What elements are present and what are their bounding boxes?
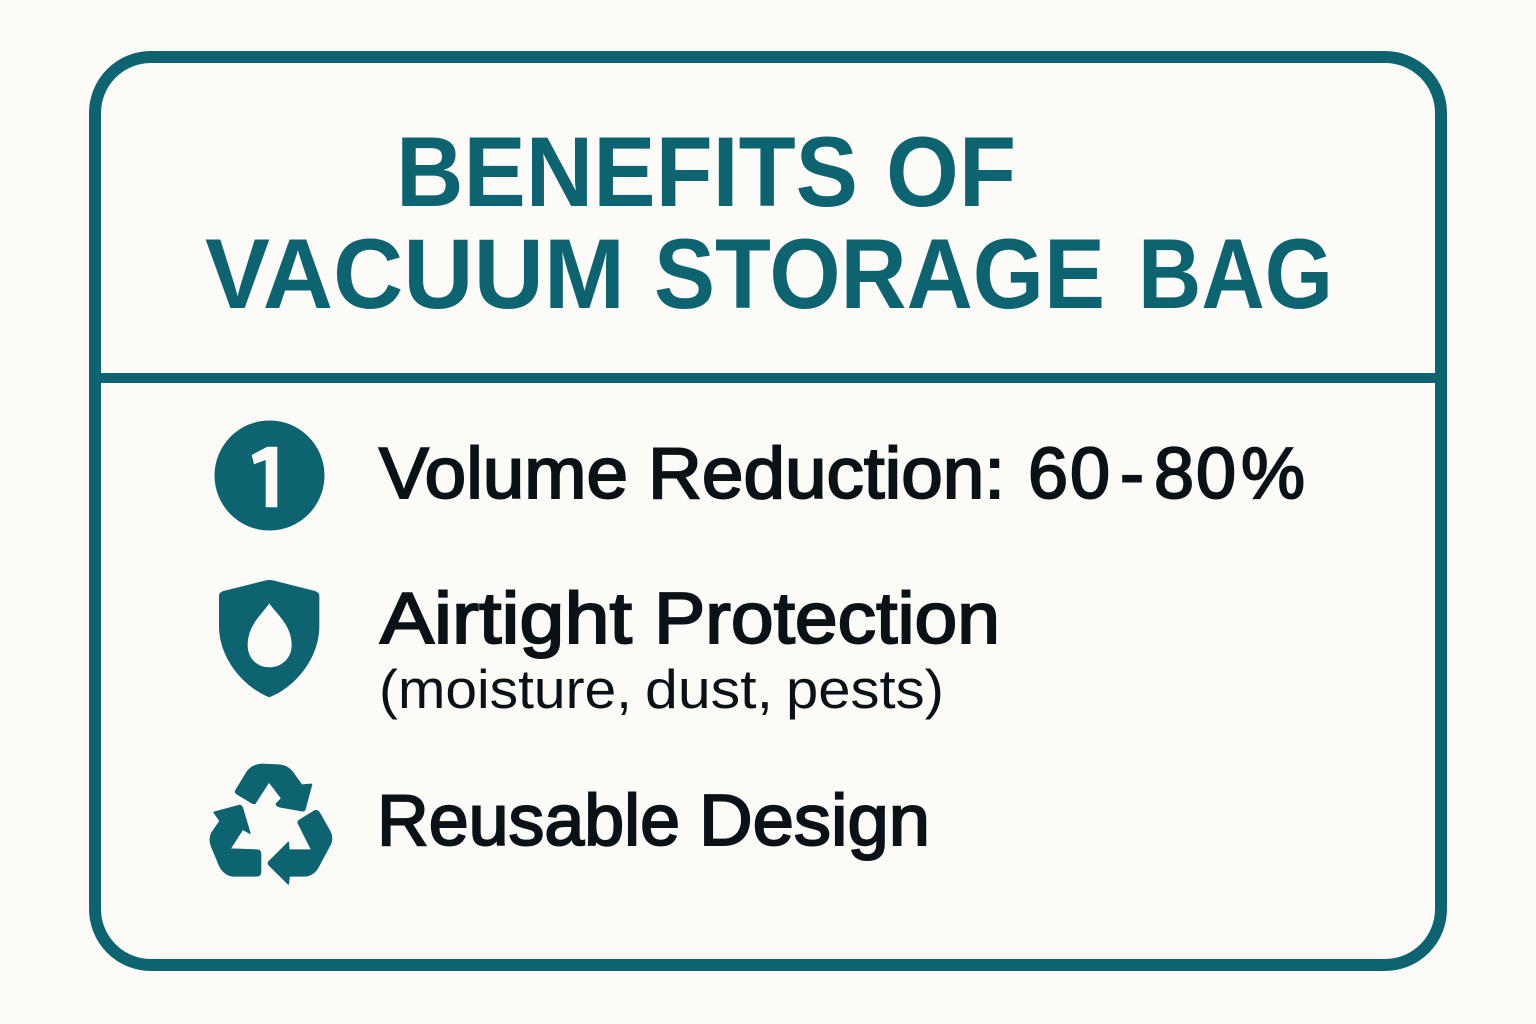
benefit: airtight protection: Protection [654,579,1000,659]
title: BENEFITS [396,116,858,227]
benefit: volume reduction: 60-80% [1028,434,1305,514]
icon: shield with water drop [219,580,319,697]
panel: rounded card border [95,57,1441,965]
benefit: reusable design [377,781,930,861]
benefit: airtight protection: (moisture, [379,658,632,720]
title [205,116,1333,329]
benefit: airtight protection [379,579,1000,720]
benefit: airtight protection: dust, [645,658,773,720]
title: STORAGE [654,218,1105,329]
title: OF [886,116,1016,227]
icon: number 1 circle [214,420,324,530]
benefit: reusable design: Reusable [377,781,680,861]
benefit: volume reduction: Volume [379,434,628,514]
title: BAG [1138,218,1333,329]
benefit: airtight protection: pests) [786,658,944,720]
benefit: airtight protection: Airtight [380,579,632,659]
benefit: volume reduction: Reduction: [648,434,1005,514]
benefit: volume reduction [379,434,1305,514]
benefit: reusable design: Design [699,781,930,861]
title: VACUUM [205,218,625,329]
icon: recycling arrows [210,764,332,884]
